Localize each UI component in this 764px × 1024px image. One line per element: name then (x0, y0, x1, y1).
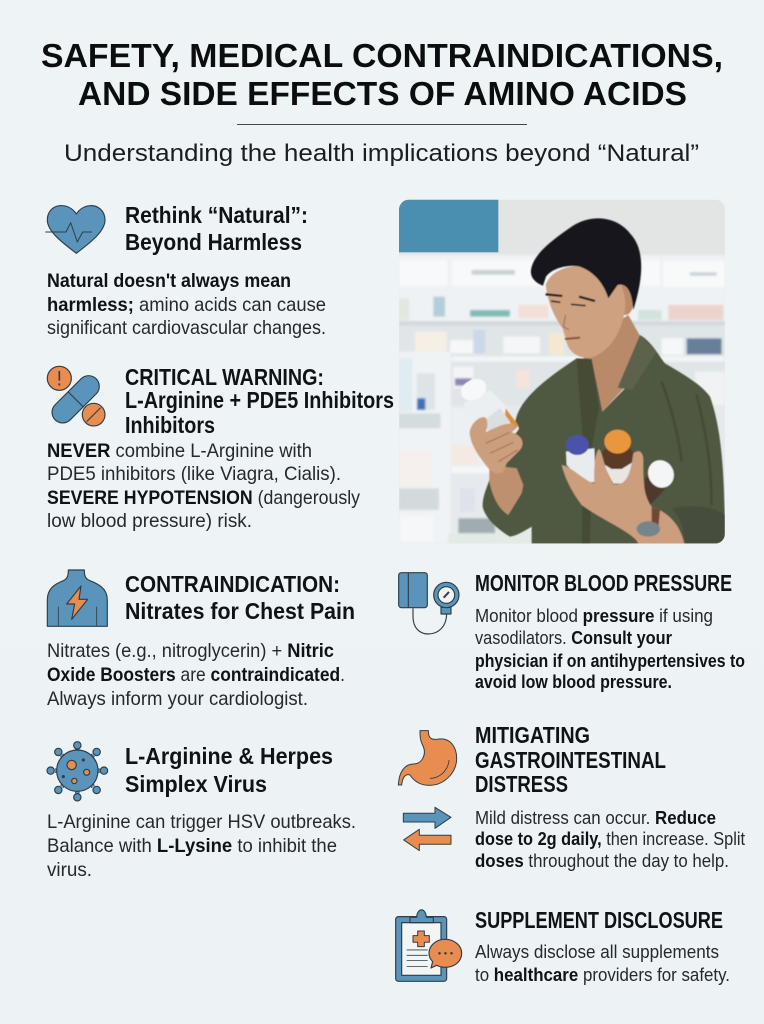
text block: Mild distress can occur. Reduce (475, 807, 716, 828)
text block: harmless; amino acids can cause (47, 294, 326, 316)
text block: Oxide Boosters are contraindicated. (47, 664, 345, 686)
heading (125, 364, 394, 438)
text block: PDE5 inhibitors (like Viagra, Cialis). (47, 463, 341, 485)
text block: Always disclose all supplements (475, 941, 719, 962)
heading: MITIGATING (475, 722, 590, 748)
icon: virus (47, 742, 108, 801)
text block (47, 811, 356, 881)
text block (475, 605, 745, 692)
text block: Nitrates (e.g., nitroglycerin) + Nitric (47, 640, 334, 662)
heading: L-Arginine + PDE5 Inhibitors (125, 387, 394, 413)
right hand and forearm (562, 449, 684, 544)
heading: DISTRESS (475, 771, 568, 797)
title: AND SIDE EFFECTS OF AMINO ACIDS (78, 75, 687, 112)
heading: Nitrates for Chest Pain (125, 598, 355, 624)
panel: rethink natural (45, 202, 326, 339)
man (457, 218, 725, 544)
heading (125, 202, 308, 255)
heading: Beyond Harmless (125, 229, 302, 255)
text block: Balance with L-Lysine to inhibit the (47, 835, 337, 857)
text block: low blood pressure) risk. (47, 510, 252, 532)
heading: CRITICAL WARNING: (125, 364, 324, 390)
text block (475, 941, 730, 985)
text block (47, 440, 360, 532)
text block: vasodilators. Consult your (475, 627, 672, 648)
icon: blood pressure cuff and gauge (399, 573, 459, 634)
panel: supplement disclosure (396, 907, 730, 985)
face details (546, 294, 595, 301)
text block: L-Arginine can trigger HSV outbreaks. (47, 811, 356, 833)
text block (47, 640, 345, 710)
pharmacy background (399, 200, 725, 544)
heading: Inhibitors (125, 412, 215, 438)
head (546, 265, 625, 358)
text block: dose to 2g daily, then increase. Split (475, 828, 745, 849)
icon: opposing arrows (403, 807, 451, 851)
left forearm (489, 465, 523, 515)
heading: L-Arginine & Herpes (125, 743, 333, 769)
panel: nitrates contraindication (47, 570, 355, 710)
text block: avoid low blood pressure. (475, 671, 672, 692)
heading (125, 571, 355, 624)
text block: Natural doesn't always mean (47, 270, 291, 292)
left hand (470, 417, 523, 473)
ear (617, 283, 634, 315)
heading: GASTROINTESTINAL (475, 747, 666, 773)
subtitle: Understanding the health implications beyond “Natural” (64, 140, 699, 167)
text block (47, 270, 326, 339)
text block: virus. (47, 859, 92, 881)
title: SAFETY, MEDICAL CONTRAINDICATIONS, (41, 37, 723, 74)
panel: gastrointestinal distress (398, 722, 745, 871)
title (41, 37, 723, 112)
panel: monitor blood pressure (399, 570, 745, 692)
photo: man reading supplement bottles in a pharmacy (399, 200, 725, 544)
text block (475, 807, 745, 871)
heading: Simplex Virus (125, 771, 267, 797)
heading (475, 722, 666, 797)
heading: CONTRAINDICATION: (125, 571, 340, 597)
icon: torso with lightning bolt (47, 570, 107, 626)
text block: significant cardiovascular changes. (47, 317, 326, 339)
icon: pill and warning (47, 366, 105, 427)
text block: doses throughout the day to help. (475, 850, 729, 871)
text block: Monitor blood pressure if using (475, 605, 713, 626)
hair (531, 218, 641, 310)
text block: NEVER combine L-Arginine with (47, 440, 312, 462)
heading (125, 743, 333, 797)
icon: stomach (398, 731, 457, 785)
icon: heart with pulse (45, 206, 105, 253)
icon: clipboard with speech bubble (396, 910, 462, 981)
bottles in other hand (566, 430, 678, 506)
neck (582, 315, 643, 412)
text block: Always inform your cardiologist. (47, 688, 308, 710)
panel: critical warning (47, 364, 394, 532)
bottle held up (461, 378, 520, 434)
panel: herpes simplex (47, 742, 356, 881)
text block: to healthcare providers for safety. (475, 964, 730, 985)
heading: Rethink “Natural”: (125, 202, 308, 228)
watch (637, 507, 660, 537)
shirt (483, 335, 725, 544)
text block: SEVERE HYPOTENSION (dangerously (47, 487, 360, 509)
